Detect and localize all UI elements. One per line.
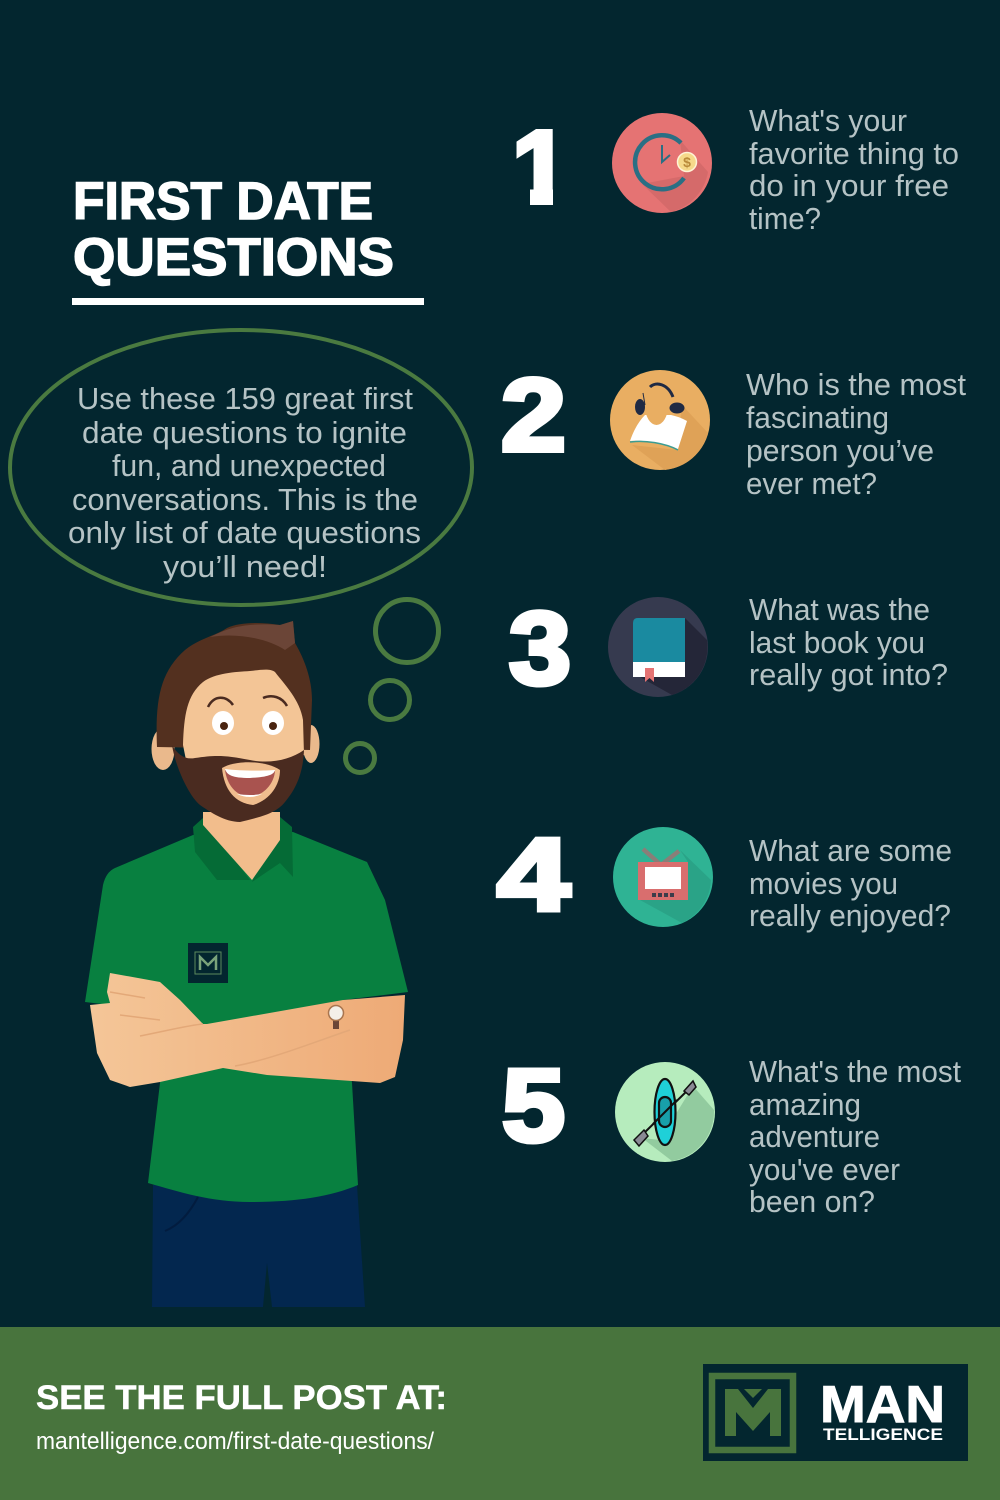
question 5: amazing	[749, 1087, 861, 1122]
footer call to action	[36, 1379, 447, 1455]
crossed arms	[90, 973, 405, 1087]
eyes	[208, 696, 287, 735]
icon: clock with coin	[612, 113, 712, 213]
number 1: 1	[512, 110, 569, 224]
item 5	[502, 1048, 961, 1219]
question 2: Who is the most	[746, 367, 966, 402]
question 2: ever met?	[746, 466, 877, 501]
hair	[157, 621, 312, 750]
question 5: adventure	[749, 1119, 880, 1154]
neck	[203, 812, 280, 880]
item 1	[516, 109, 958, 230]
footer call to action: mantelligence.com/first-date-questions/	[36, 1428, 434, 1455]
question 4: What are some	[749, 833, 952, 868]
icon: kayak	[615, 1062, 715, 1162]
question 2	[746, 367, 966, 501]
question 4	[749, 833, 952, 933]
mouth	[222, 762, 280, 805]
item 2	[501, 358, 966, 501]
footer call to action: SEE THE FULL POST AT:	[36, 1379, 447, 1417]
thought bubble: only list of date questions	[68, 515, 421, 550]
question 4: movies you	[749, 866, 898, 901]
question 3: really got into?	[749, 657, 948, 692]
question 5: you've ever	[749, 1152, 900, 1187]
illustration: bearded man with crossed arms	[85, 621, 408, 1307]
question 3: What was the	[749, 592, 930, 627]
question 1	[749, 103, 959, 236]
number 2: 2	[501, 358, 566, 472]
icon: book	[608, 597, 708, 697]
number 4: 4	[497, 817, 570, 932]
item 3	[509, 591, 948, 706]
number 5: 5	[502, 1048, 565, 1163]
title	[72, 172, 424, 305]
question 2: fascinating	[746, 400, 889, 435]
shirt	[85, 817, 408, 1202]
question 2: person you’ve	[746, 433, 934, 468]
footer band	[0, 1327, 1000, 1500]
icon: person with headset	[610, 370, 710, 470]
question 5	[749, 1054, 961, 1219]
question 3: last book you	[749, 625, 925, 660]
question 1: do in your free	[749, 168, 949, 203]
question 1: favorite thing to	[749, 136, 959, 171]
logo	[703, 1364, 968, 1461]
ears	[152, 725, 320, 770]
thought bubble: Use these 159 great first	[77, 381, 413, 416]
item 4	[497, 817, 952, 933]
title: FIRST DATE	[73, 172, 373, 231]
trousers	[152, 1185, 365, 1307]
face	[183, 670, 304, 770]
thought bubble: date questions to ignite	[82, 415, 407, 450]
beard	[172, 745, 304, 822]
logo: MAN	[820, 1376, 945, 1434]
question 4: really enjoyed?	[749, 898, 951, 933]
question 3	[749, 592, 948, 692]
question 1: What's your	[749, 103, 907, 138]
question 1: time?	[749, 201, 821, 236]
title: QUESTIONS	[73, 228, 394, 287]
icon: clock with coin: $	[683, 154, 691, 170]
thought bubble	[10, 330, 472, 772]
shirt badge	[188, 943, 228, 983]
icon: television	[613, 827, 713, 927]
number 3: 3	[509, 591, 571, 706]
watch	[328, 1006, 344, 1029]
question 5: been on?	[749, 1184, 875, 1219]
logo: TELLIGENCE	[823, 1425, 943, 1444]
thought bubble: you’ll need!	[163, 549, 327, 584]
thought bubble: conversations. This is the	[72, 482, 418, 517]
thought bubble: fun, and unexpected	[112, 448, 386, 483]
question 5: What's the most	[749, 1054, 961, 1089]
